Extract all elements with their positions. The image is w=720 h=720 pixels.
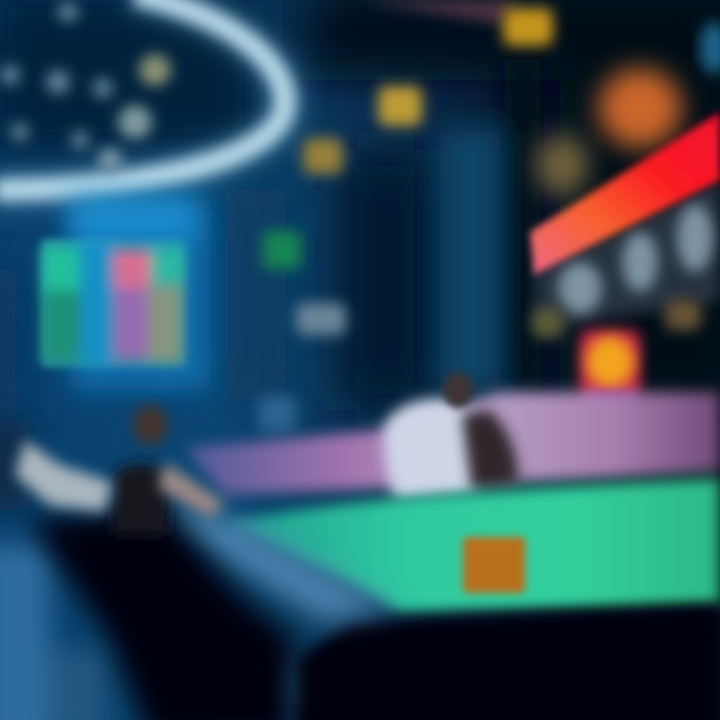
orange chip box — [463, 537, 525, 593]
table front shadow — [295, 604, 720, 720]
sign lights, orange cluster — [536, 68, 682, 195]
green table — [225, 478, 720, 612]
slot light — [580, 330, 640, 408]
ceiling beam — [360, 0, 520, 24]
wall chart panel — [42, 195, 195, 366]
sign panel with lights — [535, 180, 720, 330]
ceiling ring light — [0, 0, 286, 190]
blue table edge — [155, 515, 395, 622]
top right blue light — [700, 22, 720, 74]
red neon sign band — [530, 112, 720, 275]
floor — [0, 420, 288, 720]
wall columns — [70, 60, 540, 390]
ceiling and dark upper area — [0, 0, 720, 420]
floating gold and green lights — [258, 8, 553, 432]
sofa — [185, 392, 720, 495]
hanging lights inside the ring — [0, 2, 171, 172]
seated person in foreground — [15, 405, 295, 720]
man in white shirt at back — [384, 372, 518, 500]
lower sign glow — [533, 300, 701, 338]
